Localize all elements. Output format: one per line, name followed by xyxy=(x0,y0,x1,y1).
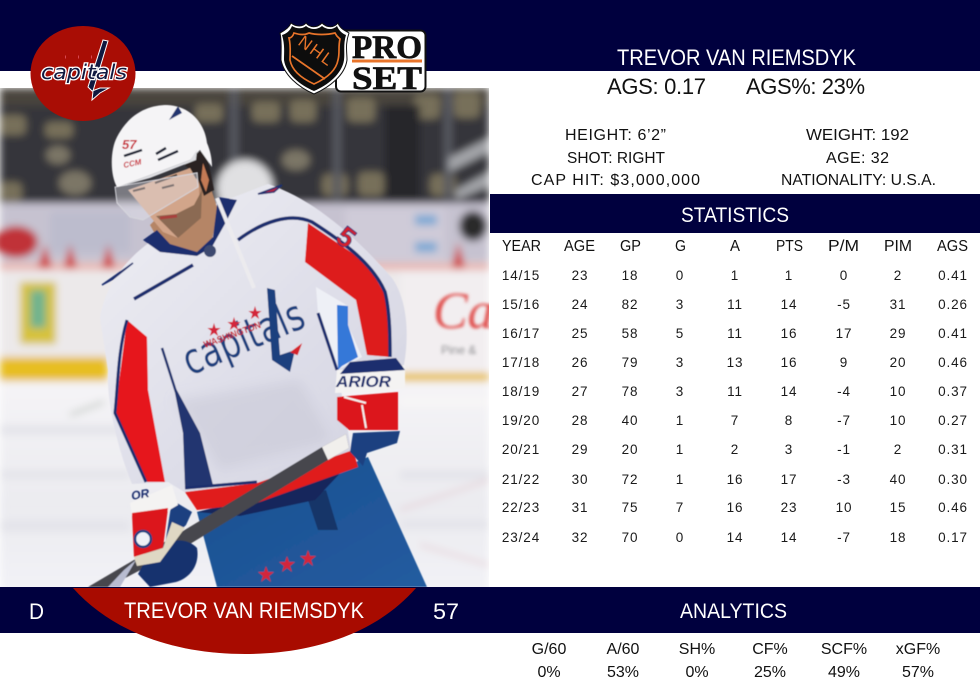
statistics heading: STATISTICS xyxy=(681,204,789,227)
SCF%: 49% xyxy=(828,664,860,681)
analytics values xyxy=(532,641,940,681)
AGS summary: AGS: 0.17 xyxy=(607,74,706,99)
row 23/24: 32 xyxy=(572,530,588,545)
row 20/21: 20/21 xyxy=(502,442,540,457)
SH%: 0% xyxy=(685,664,709,681)
jersey number: 57 xyxy=(433,599,459,624)
NHL shield xyxy=(280,23,349,94)
player photo xyxy=(0,88,494,591)
row 15/16: -5 xyxy=(837,297,851,312)
row 17/18: 9 xyxy=(840,355,848,370)
arena background xyxy=(0,88,489,591)
row 17/18: 16 xyxy=(781,355,797,370)
row 20/21 xyxy=(502,442,968,457)
player bio left xyxy=(531,127,700,189)
player bio right: NATIONALITY: U.S.A. xyxy=(781,172,936,189)
row 23/24: 14 xyxy=(781,530,797,545)
bottom nameplate band xyxy=(0,587,490,633)
NHL letters: NHL xyxy=(295,32,337,70)
xGF%: 57% xyxy=(902,664,934,681)
row 16/17: 11 xyxy=(727,326,743,341)
glove brand: ARIOR xyxy=(335,374,391,391)
table header: GP xyxy=(620,238,641,255)
position: D xyxy=(29,599,44,624)
team logo badge: capitals xyxy=(41,60,127,84)
row 21/22: 16 xyxy=(727,472,743,487)
ear and hair xyxy=(183,150,214,196)
row 18/19: 10 xyxy=(890,384,906,399)
orange bar xyxy=(352,60,422,62)
row 19/20: 40 xyxy=(622,413,638,428)
row 18/19: 3 xyxy=(676,384,684,399)
row 16/17: 5 xyxy=(676,326,684,341)
row 19/20: 8 xyxy=(785,413,793,428)
face xyxy=(128,168,200,238)
row 15/16: 31 xyxy=(890,297,906,312)
row 22/23: 22/23 xyxy=(502,500,540,515)
row 19/20: 10 xyxy=(890,413,906,428)
red nameplate arc xyxy=(73,588,416,654)
Pro Set logo xyxy=(280,23,426,97)
row 15/16: 24 xyxy=(572,297,588,312)
row 15/16: 11 xyxy=(727,297,743,312)
glove brand: OR xyxy=(130,486,151,503)
row 20/21: 20 xyxy=(622,442,638,457)
row 22/23: 23 xyxy=(781,500,797,515)
row 22/23: 16 xyxy=(727,500,743,515)
row 21/22: 72 xyxy=(622,472,638,487)
visor xyxy=(115,173,198,220)
row 18/19: 0.37 xyxy=(938,384,968,399)
collar xyxy=(143,197,237,256)
row 16/17: 25 xyxy=(572,326,588,341)
row 21/22: 30 xyxy=(572,472,588,487)
helmet number: 57 xyxy=(122,137,137,152)
row 22/23 xyxy=(502,500,968,515)
player bio right: WEIGHT: 192 xyxy=(806,127,909,144)
table header: PTS xyxy=(776,238,803,255)
helmet brand: CCM xyxy=(123,157,143,170)
eyes and brows xyxy=(133,175,177,191)
statistics heading band xyxy=(490,194,980,233)
row 16/17 xyxy=(502,326,968,341)
table header: AGE xyxy=(564,238,595,255)
row 23/24: 18 xyxy=(890,530,906,545)
mouth xyxy=(160,216,177,218)
row 22/23: 75 xyxy=(622,500,638,515)
G/60: 0% xyxy=(537,664,561,681)
xGF% xyxy=(896,641,940,681)
row 19/20: -7 xyxy=(837,413,851,428)
row 15/16: 15/16 xyxy=(502,297,540,312)
row 19/20: 1 xyxy=(676,413,684,428)
row 22/23: 10 xyxy=(836,500,852,515)
player xyxy=(88,105,427,587)
xGF%: xGF% xyxy=(896,641,940,658)
jersey hem xyxy=(185,450,358,510)
chest stars xyxy=(207,306,262,336)
shoulder patches xyxy=(102,185,282,285)
row 15/16 xyxy=(502,297,968,312)
row 20/21: 0.31 xyxy=(938,442,968,457)
jersey wordmark: capitals xyxy=(175,290,312,386)
row 23/24: 23/24 xyxy=(502,530,540,545)
row 17/18: 17/18 xyxy=(502,355,540,370)
top navy band xyxy=(0,0,980,71)
chin strap xyxy=(217,198,254,288)
G/60 xyxy=(532,641,566,681)
SH%: SH% xyxy=(679,641,715,658)
row 22/23: 31 xyxy=(572,500,588,515)
row 21/22: 1 xyxy=(676,472,684,487)
CF% xyxy=(752,641,788,681)
A/60 xyxy=(607,641,640,681)
row 19/20: 19/20 xyxy=(502,413,540,428)
table header: YEAR xyxy=(502,238,541,255)
table header: PIM xyxy=(884,238,912,255)
row 16/17: 0.41 xyxy=(938,326,968,341)
analytics heading band xyxy=(490,587,980,633)
row 20/21: 29 xyxy=(572,442,588,457)
row 16/17: 16/17 xyxy=(502,326,540,341)
SET lettering: SET xyxy=(352,61,422,97)
CF%: 25% xyxy=(754,664,786,681)
sleeve number: 5 xyxy=(330,220,362,254)
left sleeve stripe xyxy=(115,320,165,482)
row 14/15: 1 xyxy=(785,268,793,283)
row 15/16: 0.26 xyxy=(938,297,968,312)
table header: A xyxy=(730,238,741,255)
A/60: A/60 xyxy=(607,641,640,658)
player bio left: CAP HIT: $3,000,000 xyxy=(531,172,700,189)
row 15/16: 82 xyxy=(622,297,638,312)
row 21/22: 0.30 xyxy=(938,472,968,487)
row 18/19: 14 xyxy=(781,384,797,399)
left glove xyxy=(130,485,198,587)
table header: P/M xyxy=(828,238,859,255)
row 14/15: 0 xyxy=(676,268,684,283)
helmet xyxy=(112,105,212,187)
row 17/18: 20 xyxy=(890,355,906,370)
row 19/20: 7 xyxy=(731,413,739,428)
right sleeve stripe xyxy=(305,223,390,357)
row 16/17: 17 xyxy=(836,326,852,341)
player name heading: TREVOR VAN RIEMSDYK xyxy=(617,45,856,70)
row 17/18: 0.46 xyxy=(938,355,968,370)
row 23/24: -7 xyxy=(837,530,851,545)
row 14/15: 0 xyxy=(840,268,848,283)
player photo: Pine & xyxy=(441,343,476,357)
row 20/21: 2 xyxy=(731,442,739,457)
row 14/15: 0.41 xyxy=(938,268,968,283)
team logo badge xyxy=(30,26,136,121)
row 18/19: 78 xyxy=(622,384,638,399)
SCF%: SCF% xyxy=(821,641,867,658)
player bio right: AGE: 32 xyxy=(826,150,889,167)
row 19/20: 0.27 xyxy=(938,413,968,428)
row 14/15: 23 xyxy=(572,268,588,283)
row 17/18 xyxy=(502,355,968,370)
row 14/15: 2 xyxy=(894,268,902,283)
row 20/21: 2 xyxy=(894,442,902,457)
SH% xyxy=(679,641,715,681)
row 18/19: 18/19 xyxy=(502,384,540,399)
row 15/16: 3 xyxy=(676,297,684,312)
player bio left: HEIGHT: 6’2” xyxy=(565,127,666,144)
row 22/23: 0.46 xyxy=(938,500,968,515)
row 19/20 xyxy=(502,413,968,428)
row 23/24: 70 xyxy=(622,530,638,545)
row 16/17: 58 xyxy=(622,326,638,341)
PRO lettering: PRO xyxy=(352,30,422,66)
AGS summary xyxy=(607,74,865,99)
statistics table xyxy=(502,238,968,545)
table header: G xyxy=(675,238,686,255)
table header: AGS xyxy=(937,238,968,255)
row 18/19: 27 xyxy=(572,384,588,399)
row 23/24: 14 xyxy=(727,530,743,545)
player bio right xyxy=(781,127,936,189)
row 21/22 xyxy=(502,472,968,487)
A/60: 53% xyxy=(607,664,639,681)
row 17/18: 13 xyxy=(727,355,743,370)
row 23/24 xyxy=(502,530,968,545)
row 18/19 xyxy=(502,384,968,399)
row 20/21: 1 xyxy=(676,442,684,457)
SCF% xyxy=(821,641,867,681)
row 17/18: 79 xyxy=(622,355,638,370)
row 14/15: 18 xyxy=(622,268,638,283)
right glove xyxy=(335,358,405,466)
row 16/17: 16 xyxy=(781,326,797,341)
row 21/22: 21/22 xyxy=(502,472,540,487)
neck xyxy=(150,178,218,253)
row 17/18: 26 xyxy=(572,355,588,370)
row 23/24: 0 xyxy=(676,530,684,545)
row 14/15: 14/15 xyxy=(502,268,540,283)
analytics heading: ANALYTICS xyxy=(680,600,787,623)
row 20/21: 3 xyxy=(785,442,793,457)
row 22/23: 7 xyxy=(676,500,684,515)
row 17/18: 3 xyxy=(676,355,684,370)
pants xyxy=(197,457,427,587)
row 16/17: 29 xyxy=(890,326,906,341)
stick xyxy=(88,434,349,587)
row 18/19: -4 xyxy=(837,384,851,399)
row 14/15 xyxy=(502,268,968,283)
jersey fold shading xyxy=(184,386,317,462)
table header xyxy=(502,238,968,255)
row 14/15: 1 xyxy=(731,268,739,283)
row 19/20: 28 xyxy=(572,413,588,428)
row 23/24: 0.17 xyxy=(938,530,968,545)
logo plate xyxy=(336,30,426,92)
G/60: G/60 xyxy=(532,641,566,658)
jersey xyxy=(100,184,407,493)
jersey side panel xyxy=(173,383,213,487)
row 21/22: 17 xyxy=(781,472,797,487)
row 21/22: 40 xyxy=(890,472,906,487)
row 15/16: 14 xyxy=(781,297,797,312)
row 22/23: 15 xyxy=(890,500,906,515)
row 20/21: -1 xyxy=(837,442,851,457)
CF%: CF% xyxy=(752,641,788,658)
pants stars xyxy=(258,550,316,582)
gap between arm and torso xyxy=(316,287,362,370)
rink board lettering: Ca xyxy=(433,283,494,340)
row 18/19: 11 xyxy=(727,384,743,399)
player bio left: SHOT: RIGHT xyxy=(567,150,665,167)
AGS summary: AGS%: 23% xyxy=(746,74,865,99)
row 21/22: -3 xyxy=(837,472,851,487)
beard xyxy=(156,190,202,238)
player name: TREVOR VAN RIEMSDYK xyxy=(124,598,364,623)
washington text: WASHINGTON xyxy=(202,320,263,351)
